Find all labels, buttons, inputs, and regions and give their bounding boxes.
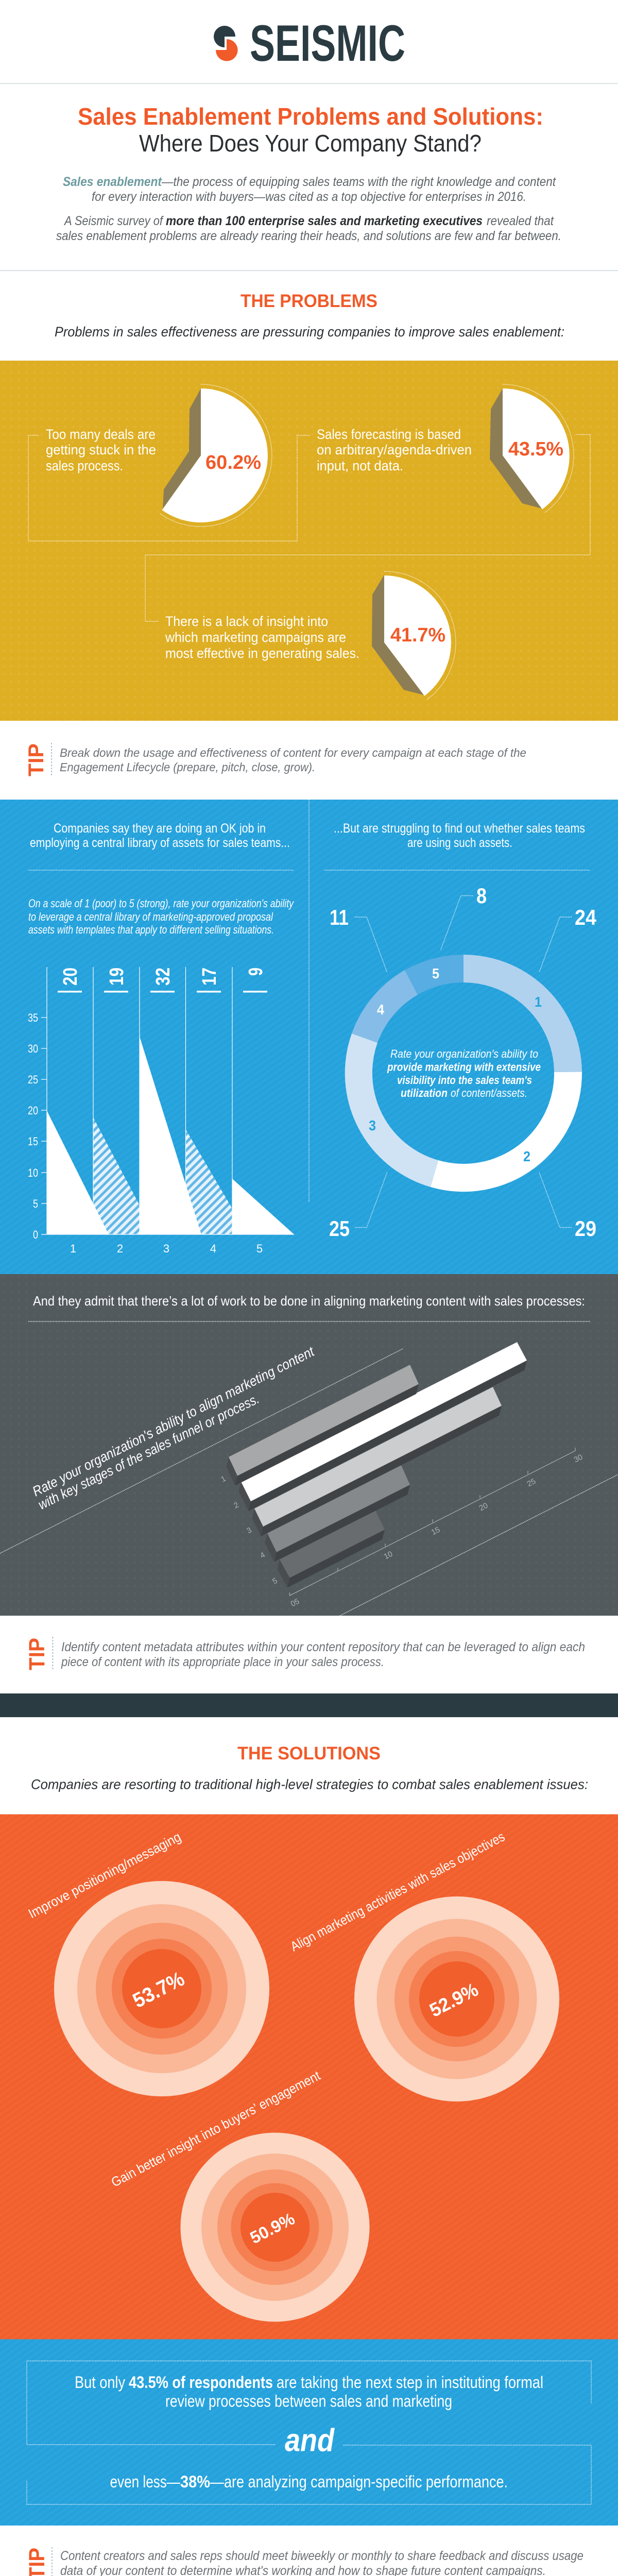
heading: central library: employing a central library of assets for sales teams... — [30, 836, 290, 850]
intro paragraphs: A Seismic survey of — [63, 214, 164, 228]
concentric circle: 52.9%: 52.9% — [426, 1979, 482, 2021]
donut caption: of content/assets. — [451, 1087, 527, 1099]
chart: triangle bars: 5 — [256, 1242, 263, 1255]
title — [78, 103, 543, 157]
chart: triangle bars: 5 — [33, 1197, 38, 1210]
chart: triangle bars: 9 — [245, 968, 267, 976]
chart: triangle bars: 17 — [199, 968, 220, 986]
intro paragraphs: for every interaction with buyers—was cited as a top objective for enterprises in 2016. — [92, 190, 526, 204]
chart: triangle bars: 15 — [28, 1135, 38, 1148]
chart: 3D bars: 20 — [478, 1501, 489, 1513]
chart: triangle bars: 20 — [28, 1104, 38, 1117]
chart: 3D bars: 4 — [259, 1551, 267, 1560]
rotated label: positioning: Improve positioning/messaging — [26, 1829, 183, 1921]
panel: review processes callout: are taking the next step in instituting formal — [277, 2373, 543, 2392]
chart: 3D bars: 30 — [573, 1453, 584, 1464]
chart: donut: 24 — [575, 905, 597, 929]
panel: review processes callout — [0, 2339, 618, 2526]
chart: donut: 11 — [330, 905, 349, 929]
tip 1: Engagement Lifecycle (prepare, pitch, close, grow). — [60, 760, 315, 774]
survey question: central library: assets with templates that apply to different selling situations. — [28, 923, 274, 936]
tip 1: Break down the usage and effectiveness of content for every campaign at each stage of the — [60, 746, 526, 759]
title: Where Does Your Company Stand? — [139, 130, 482, 157]
text: stuck deals: Too many deals are — [46, 427, 156, 442]
concentric circle: 50.9% — [180, 2133, 370, 2321]
panel: review processes callout: 43.5% of respondents — [129, 2373, 273, 2392]
panel: review processes callout: 38% — [180, 2472, 210, 2491]
tip 1: TIP — [24, 743, 48, 776]
title: Sales Enablement Problems and Solutions: — [78, 103, 543, 130]
chart: 3D bars: 2 — [232, 1501, 241, 1510]
survey question: central library: On a scale of 1 (poor) to 5 (strong), rate your organization's ability — [28, 897, 295, 910]
survey question: central library: to leverage a central library of marketing-approved proposal — [28, 910, 273, 923]
text: stuck deals — [46, 427, 156, 473]
chart: 3D bars: 3 — [245, 1526, 253, 1535]
pie chart: 60.2%: 60.2% — [205, 452, 261, 473]
pie chart: 43.5%: 43.5% — [508, 438, 563, 460]
chart: donut: 25 — [329, 1216, 350, 1241]
concentric circle: 53.7%: 53.7% — [129, 1968, 188, 2012]
chart: triangle bars: 25 — [28, 1073, 38, 1086]
chart: triangle bars: 10 — [28, 1166, 38, 1179]
intro paragraphs: —the process of equipping sales teams with the right knowledge and content — [161, 175, 556, 189]
logo: Seismic header: SEISMIC — [250, 14, 405, 72]
panel: problem statistics — [0, 361, 618, 721]
tip 3 — [25, 2547, 583, 2576]
donut caption: visibility into the sales team's — [397, 1074, 532, 1087]
rotated survey question: Rate your organization's ability to align marketing content — [30, 1343, 317, 1499]
tip 2: piece of content with its appropriate place in your sales process. — [61, 1655, 384, 1669]
panel: review processes callout: even less— — [110, 2472, 180, 2491]
heading: the problems: THE PROBLEMS — [241, 291, 377, 311]
chart: triangle bars: 35 — [28, 1011, 38, 1024]
logo: Seismic header — [214, 14, 405, 72]
donut caption: utilization — [401, 1087, 448, 1099]
pie chart: 41.7% — [372, 571, 456, 700]
chart: 3D bars: 10 — [383, 1550, 394, 1561]
heading: sales team usage — [334, 821, 585, 850]
subheading: problems: Problems in sales effectiveness are pressuring companies to improve sales enablement: — [55, 324, 564, 340]
chart: 3D bars: 25 — [526, 1477, 537, 1488]
chart: donut: 2 — [523, 1148, 530, 1164]
pie chart: 41.7%: 41.7% — [390, 624, 445, 646]
chart: triangle bars: 30 — [28, 1042, 38, 1055]
heading: central library — [30, 821, 290, 850]
rotated label: buyer engagement: Gain better insight into buyers’ engagement — [109, 2067, 323, 2190]
chart: donut — [329, 884, 597, 1241]
concentric circle: 53.7% — [54, 1881, 269, 2096]
concentric circle: 52.9% — [354, 1896, 559, 2102]
text: lack of insight: most effective in generating sales. — [165, 646, 359, 661]
panel: solutions — [0, 1815, 618, 2339]
chart: triangle bars: 20 — [60, 968, 81, 986]
intro paragraphs: revealed that — [487, 214, 554, 228]
chart: triangle bars: 4 — [210, 1242, 216, 1255]
heading: the solutions: THE SOLUTIONS — [237, 1743, 381, 1764]
donut caption: Rate your organization's ability to — [390, 1047, 538, 1060]
survey question: central library — [28, 897, 295, 936]
chart: 3D bars: 1 — [219, 1475, 228, 1484]
chart: donut: 1 — [535, 994, 542, 1010]
panel: review processes callout: But only — [75, 2373, 125, 2392]
chart: donut: 4 — [377, 1002, 384, 1018]
concentric circle: 50.9%: 50.9% — [247, 2209, 298, 2247]
pie chart: 43.5% — [490, 384, 574, 513]
intro paragraphs: sales enablement problems are already rearing their heads, and solutions are few and far between. — [56, 229, 561, 243]
chart: triangle bars: 2 — [117, 1242, 123, 1255]
chart: donut: 3 — [369, 1117, 376, 1133]
panel: review processes callout: review processes between sales and marketing — [165, 2392, 452, 2410]
chart: 3D bars: 05 — [289, 1597, 301, 1608]
chart: triangle bars: 3 — [163, 1242, 169, 1255]
chart: donut: 29 — [575, 1216, 596, 1241]
chart: donut: 8 — [476, 884, 487, 908]
rotated survey question: with key stages of the sales funnel or process. — [36, 1391, 262, 1513]
text: stuck deals: getting stuck in the — [46, 442, 156, 457]
tip 1 — [24, 743, 526, 776]
subheading: solutions: Companies are resorting to traditional high-level strategies to combat sales enablement issues: — [31, 1776, 588, 1792]
intro paragraphs: Sales enablement — [63, 175, 163, 189]
text: stuck deals: sales process. — [46, 458, 123, 473]
text: lack of insight: which marketing campaigns are — [165, 630, 346, 645]
dark divider band — [0, 1693, 618, 1717]
heading: sales team usage: are using such assets. — [407, 836, 512, 850]
tip 2 — [25, 1637, 585, 1670]
chart: triangle bars: 19 — [106, 968, 128, 986]
intro paragraphs — [56, 175, 561, 243]
chart: donut: 5 — [432, 965, 439, 981]
text: sales forecasting: input, not data. — [317, 458, 403, 473]
text: lack of insight — [165, 614, 359, 661]
chart: 3D bars: 5 — [271, 1577, 279, 1586]
chart: triangle bars — [28, 967, 294, 1255]
tip 2: TIP — [25, 1638, 49, 1670]
panel: alignment with sales processes — [0, 1274, 618, 1616]
heading: central library: Companies say they are doing an OK job in — [54, 821, 266, 836]
panel: review processes callout: and — [285, 2422, 335, 2459]
text: sales forecasting: Sales forecasting is based — [317, 427, 461, 442]
panel: central library and utilization — [0, 800, 618, 1274]
donut caption: provide marketing with extensive — [387, 1060, 541, 1074]
chart: 3D bars: 15 — [430, 1526, 441, 1537]
chart: triangle bars: 1 — [70, 1242, 76, 1255]
chart: triangle bars: 32 — [152, 968, 174, 986]
text: sales forecasting — [317, 427, 472, 473]
panel: review processes callout: —are analyzing campaign-specific performance. — [210, 2472, 508, 2491]
chart: triangle bars: 0 — [33, 1228, 38, 1241]
text: sales forecasting: on arbitrary/agenda-driven — [317, 442, 472, 457]
chart: 3D bars — [219, 1342, 584, 1608]
intro paragraphs: more than 100 enterprise sales and marketing executives — [166, 214, 483, 228]
donut caption — [387, 1047, 541, 1099]
pie chart: 60.2% — [160, 384, 272, 527]
text: lack of insight: There is a lack of insight into — [165, 614, 328, 629]
rotated label: align marketing: Align marketing activities with sales objectives — [288, 1828, 507, 1954]
